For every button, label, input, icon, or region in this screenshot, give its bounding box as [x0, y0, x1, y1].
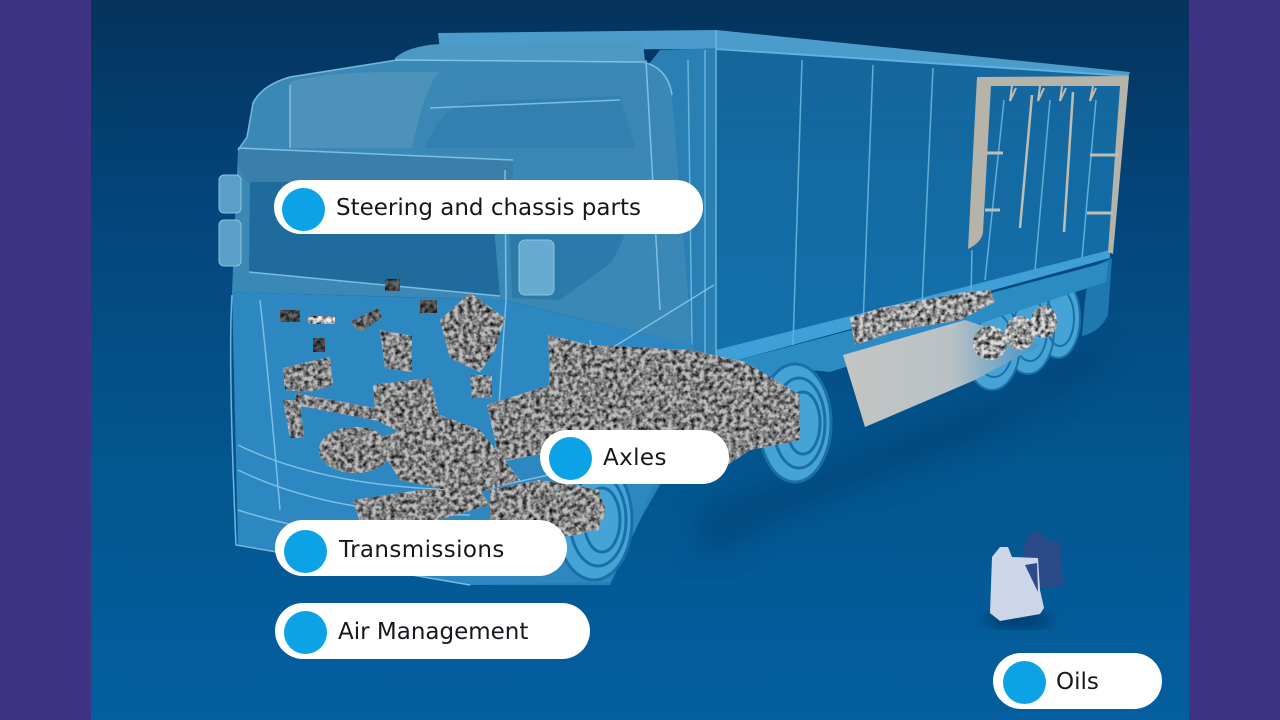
label: air management: [275, 603, 590, 659]
marker dot: [1003, 661, 1046, 704]
marker dot: [284, 530, 327, 573]
fuel tank: [843, 320, 1040, 427]
mirrors: [219, 175, 554, 295]
label text: Axles: [603, 445, 667, 471]
curtain frame: [968, 76, 1129, 254]
rear wheels: [964, 258, 1112, 390]
label text: Air Management: [338, 619, 528, 645]
marker dot: [284, 611, 327, 654]
label: transmissions: [275, 520, 567, 576]
wheels: [556, 364, 831, 580]
label: steering and chassis parts: [274, 180, 703, 234]
ground shadow: [700, 345, 1110, 560]
marker dot: [549, 437, 592, 480]
label text: Oils: [1056, 669, 1099, 695]
cab: [219, 30, 716, 585]
trailer: [438, 30, 1130, 400]
marker dot: [282, 188, 325, 231]
label text: Transmissions: [339, 537, 505, 563]
label: axles: [540, 430, 729, 484]
label: oils: [993, 653, 1162, 709]
metal drivetrain components: [280, 279, 1057, 536]
label text: Steering and chassis parts: [336, 195, 641, 221]
oil bottles icon: [984, 532, 1063, 628]
